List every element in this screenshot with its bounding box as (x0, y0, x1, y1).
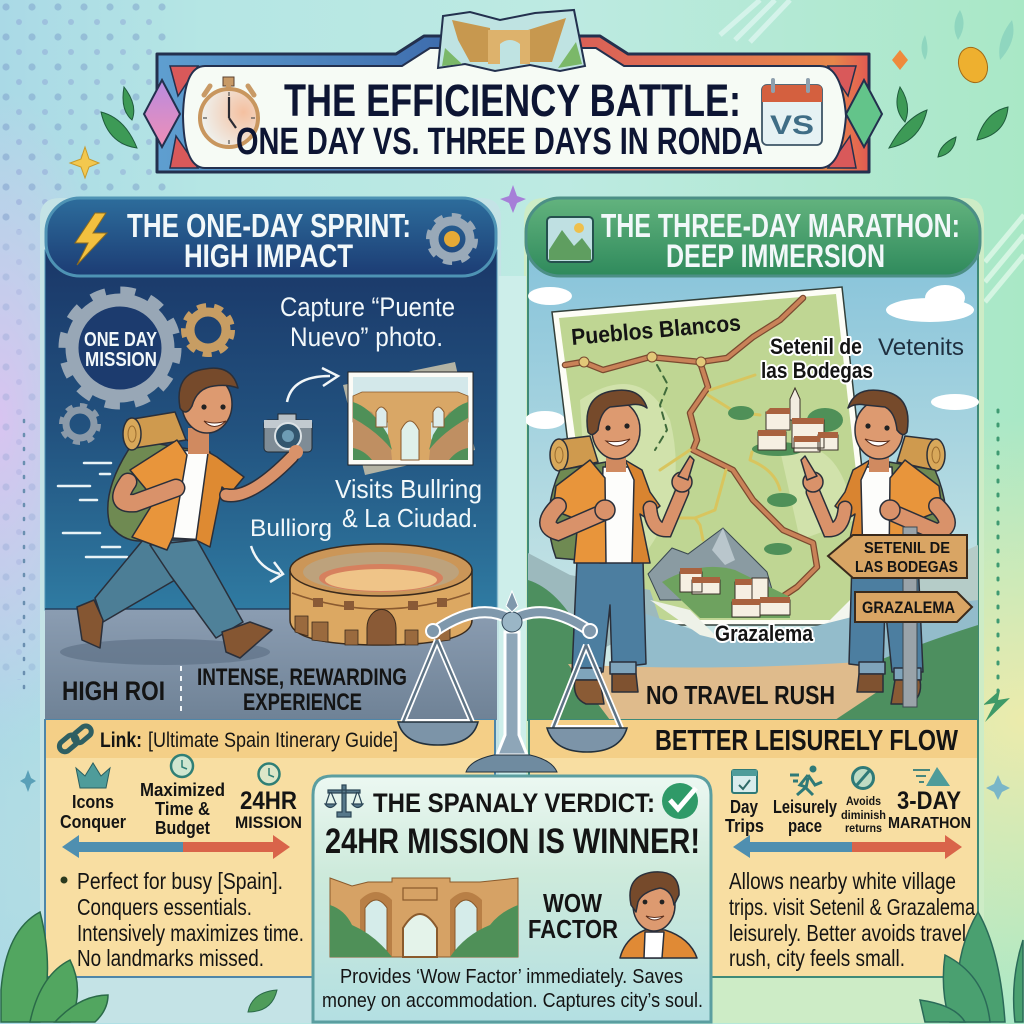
metric: avoids diminish returns (841, 768, 886, 835)
capture text (280, 292, 455, 352)
icon: landscape (547, 217, 593, 262)
metric: icons conquer (60, 763, 126, 832)
one-day body text: Perfect for busy [Spain]. (77, 868, 283, 894)
verdict text: money on accommodation. Captures city’s soul. (322, 990, 703, 1012)
map labels: Grazalema (715, 621, 814, 646)
boots (77, 600, 272, 658)
map labels: Vetenits (878, 334, 964, 361)
divider (180, 666, 182, 716)
icon: map with bridge (438, 10, 585, 71)
runner character (60, 368, 312, 665)
arms (121, 457, 292, 503)
metric: icons conquer: Conquer (60, 812, 126, 832)
verdict winner: 24HR MISSION IS WINNER! (325, 822, 700, 861)
speed lines (58, 463, 127, 557)
panel: three-day marathon (524, 198, 984, 1023)
metric: leisurely pace: pace (788, 816, 822, 836)
header text: THE ONE-DAY SPRINT: (127, 207, 411, 244)
map (552, 287, 880, 625)
three-day body text: leisurely. Better avoids travel (729, 920, 966, 946)
metric: maximized time and budget: Maximized (140, 780, 225, 800)
banner inner plate (183, 48, 846, 168)
map labels (570, 309, 964, 646)
capture text: Nuevo” photo. (290, 322, 443, 352)
frame corners (170, 66, 856, 168)
icon: check (662, 783, 698, 819)
intense rewarding experience: INTENSE, REWARDING (197, 664, 407, 691)
wow factor (528, 888, 618, 944)
title text (236, 75, 763, 163)
flow strip (530, 720, 977, 758)
photo of Puente Nuevo (343, 362, 475, 475)
clouds (525, 285, 979, 429)
metric: leisurely pace (773, 766, 837, 836)
verdict text (322, 966, 703, 1012)
bridge illustration (330, 878, 518, 957)
metric: leisurely pace: Leisurely (773, 797, 837, 817)
scales (398, 591, 627, 772)
icon: calendar VS: VS (770, 110, 814, 140)
verdict text: Provides ‘Wow Factor’ immediately. Saves (340, 966, 683, 988)
metric: avoids diminish returns: diminish (841, 808, 886, 822)
scene background (45, 250, 497, 610)
header: three-day marathon (526, 198, 980, 276)
title text: THE EFFICIENCY BATTLE: (284, 75, 741, 126)
header text (601, 207, 960, 274)
intense rewarding experience: EXPERIENCE (243, 689, 362, 716)
sky (528, 250, 978, 720)
high roi: HIGH ROI (62, 676, 165, 706)
link line (57, 724, 398, 754)
gear: small grey (62, 406, 98, 442)
metric: avoids diminish returns: Avoids (846, 794, 881, 808)
icon: chain link (57, 724, 94, 754)
gear: one day mission (63, 291, 177, 405)
banner frame (157, 36, 869, 172)
capture text: Capture “Puente (280, 292, 455, 322)
link line: [Ultimate Spain Itinerary Guide] (148, 729, 398, 752)
diamond right (846, 80, 882, 147)
title text: ONE DAY VS. THREE DAYS IN RONDA (236, 121, 763, 163)
metric: day trips: Day (730, 797, 758, 817)
hiker left (548, 390, 694, 704)
head (179, 368, 238, 454)
sign: Setenil de las Bodegas: SETENIL DE (864, 540, 950, 557)
icon: scales (325, 785, 363, 817)
green hills (528, 580, 978, 720)
map labels: Setenil de (770, 334, 862, 359)
header: one-day sprint (46, 198, 496, 276)
gear: one day mission: MISSION (85, 349, 157, 371)
metric: 3-day marathon: 3-DAY (897, 787, 961, 815)
metric: maximized time and budget: Time & (155, 799, 210, 819)
hiker right (801, 390, 947, 704)
rear leg (95, 540, 195, 622)
arrow to bullring (251, 546, 283, 582)
far hills (528, 545, 978, 680)
link line: Link: (100, 729, 142, 752)
three-day body text: rush, city feels small. (729, 945, 905, 971)
metric: 24hr mission: 24HR (240, 787, 297, 815)
visits text: Visits Bullring (335, 474, 482, 504)
wow factor: WOW (543, 888, 602, 918)
face portrait (620, 872, 697, 958)
gear: one day mission: ONE DAY (84, 329, 158, 351)
one-day body text: Conquers essentials. (77, 894, 252, 920)
diamond left (144, 80, 180, 147)
central divider (499, 276, 526, 776)
icon: gear (429, 216, 475, 262)
header text: HIGH IMPACT (184, 238, 353, 274)
header text (127, 207, 411, 274)
arrow: trade-off right (733, 835, 962, 859)
metric: 24hr mission: MISSION (235, 813, 302, 832)
panel lower body (529, 720, 978, 977)
ground (45, 609, 497, 720)
foliage: bottom left (1, 912, 108, 1022)
metric: avoids diminish returns: returns (845, 821, 882, 835)
bushes (728, 406, 797, 555)
foliage: bottom right (920, 912, 1023, 1022)
map labels: las Bodegas (761, 358, 873, 383)
one-day body text: No landmarks missed. (77, 945, 264, 971)
icon: stopwatch (200, 77, 258, 147)
bullring label: Bulliorg (250, 515, 332, 542)
one-day body text (60, 868, 304, 971)
shirt (130, 440, 244, 550)
header text: DEEP IMMERSION (666, 238, 885, 274)
sign: Setenil de las Bodegas: LAS BODEGAS (855, 559, 958, 576)
sign: Grazalema (855, 592, 972, 622)
sign: Grazalema: GRAZALEMA (862, 598, 955, 617)
bedroll (123, 412, 186, 450)
metric: 3-day marathon: MARATHON (888, 815, 971, 832)
metric: day trips: Trips (725, 816, 764, 836)
verdict heading: THE SPANALY VERDICT: (373, 788, 655, 818)
one-day body text: Intensively maximizes time. (77, 920, 304, 946)
panel: one-day sprint (40, 198, 501, 1023)
metric: icons conquer: Icons (72, 792, 114, 812)
three-day body text (729, 868, 975, 971)
arrow to photo (287, 368, 338, 402)
small leaf (248, 990, 277, 1012)
camera (264, 414, 312, 459)
backpack (108, 440, 195, 541)
bullring (290, 544, 472, 645)
panel lower body (45, 720, 495, 977)
ground shadow (60, 639, 270, 665)
metric: maximized time and budget (140, 755, 225, 838)
sandy ground (568, 662, 880, 720)
right pan (553, 645, 621, 728)
gear: brown (184, 306, 232, 354)
title banner (144, 10, 882, 172)
metric: 3-day marathon (888, 767, 971, 832)
village: Setenil (752, 388, 843, 456)
visits text (335, 474, 482, 533)
map labels: Pueblos Blancos (570, 309, 742, 350)
link strip (46, 720, 494, 758)
icon: lightning (75, 213, 107, 265)
verdict box (313, 776, 711, 1022)
wow factor: FACTOR (528, 914, 618, 944)
intense rewarding experience (197, 664, 407, 716)
front leg (150, 540, 243, 638)
roads (565, 298, 817, 597)
mountain (648, 528, 790, 618)
better leisurely flow: BETTER LEISURELY FLOW (655, 725, 959, 757)
arrow: trade-off left (62, 835, 290, 859)
visits text: & La Ciudad. (342, 503, 478, 533)
panel: verdict (313, 776, 711, 1022)
metric: maximized time and budget: Budget (155, 818, 210, 838)
beam (435, 612, 590, 631)
panel frame (40, 198, 501, 1023)
three-day body text: Allows nearby white village (729, 868, 956, 894)
metric: day trips (725, 770, 764, 836)
icon: calendar VS (762, 78, 822, 145)
decorative leaves, stars and coin (20, 43, 1010, 800)
left pan (403, 640, 472, 722)
sign: Setenil de las Bodegas (828, 535, 967, 578)
panel frame (524, 198, 984, 1023)
signpost (828, 527, 972, 707)
pole and base (497, 632, 527, 755)
no travel rush: NO TRAVEL RUSH (646, 680, 835, 710)
metric: 24hr mission (235, 764, 302, 832)
villages: Grazalema (680, 568, 790, 617)
